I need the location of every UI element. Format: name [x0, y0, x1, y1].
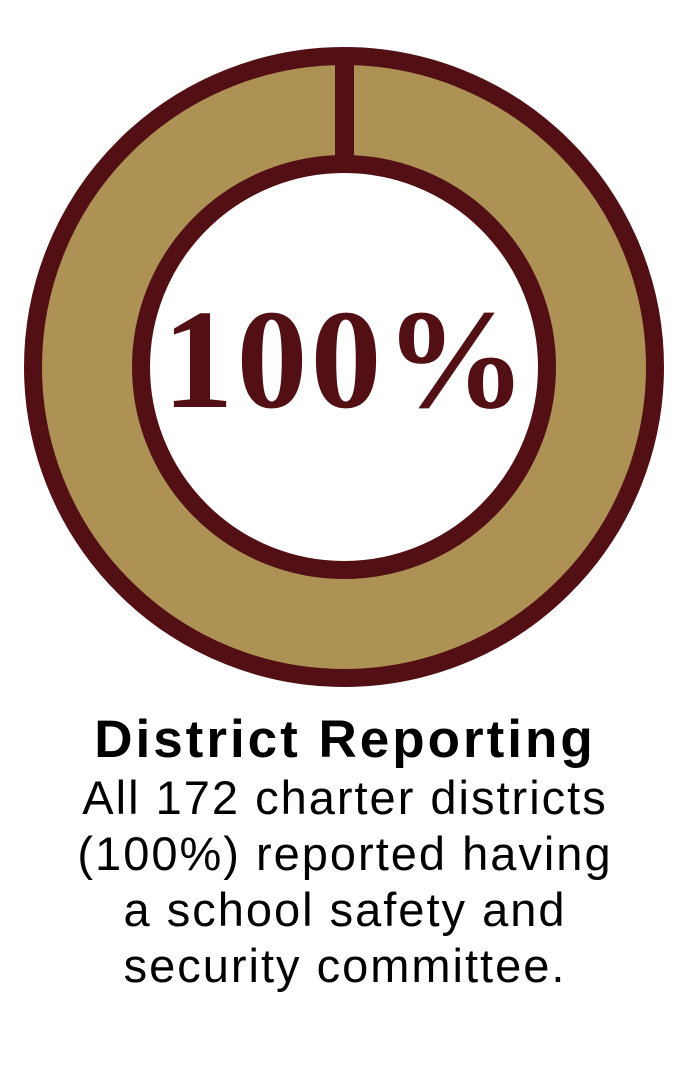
- description: [77, 771, 613, 992]
- heading: District Reporting: [94, 710, 596, 769]
- description: (100%) reported having: [77, 827, 613, 880]
- description: security committee.: [124, 939, 566, 992]
- description: a school safety and: [124, 883, 566, 936]
- value: 100%: 100%: [162, 280, 530, 438]
- description: All 172 charter districts: [82, 771, 608, 824]
- donut chart: [24, 47, 664, 687]
